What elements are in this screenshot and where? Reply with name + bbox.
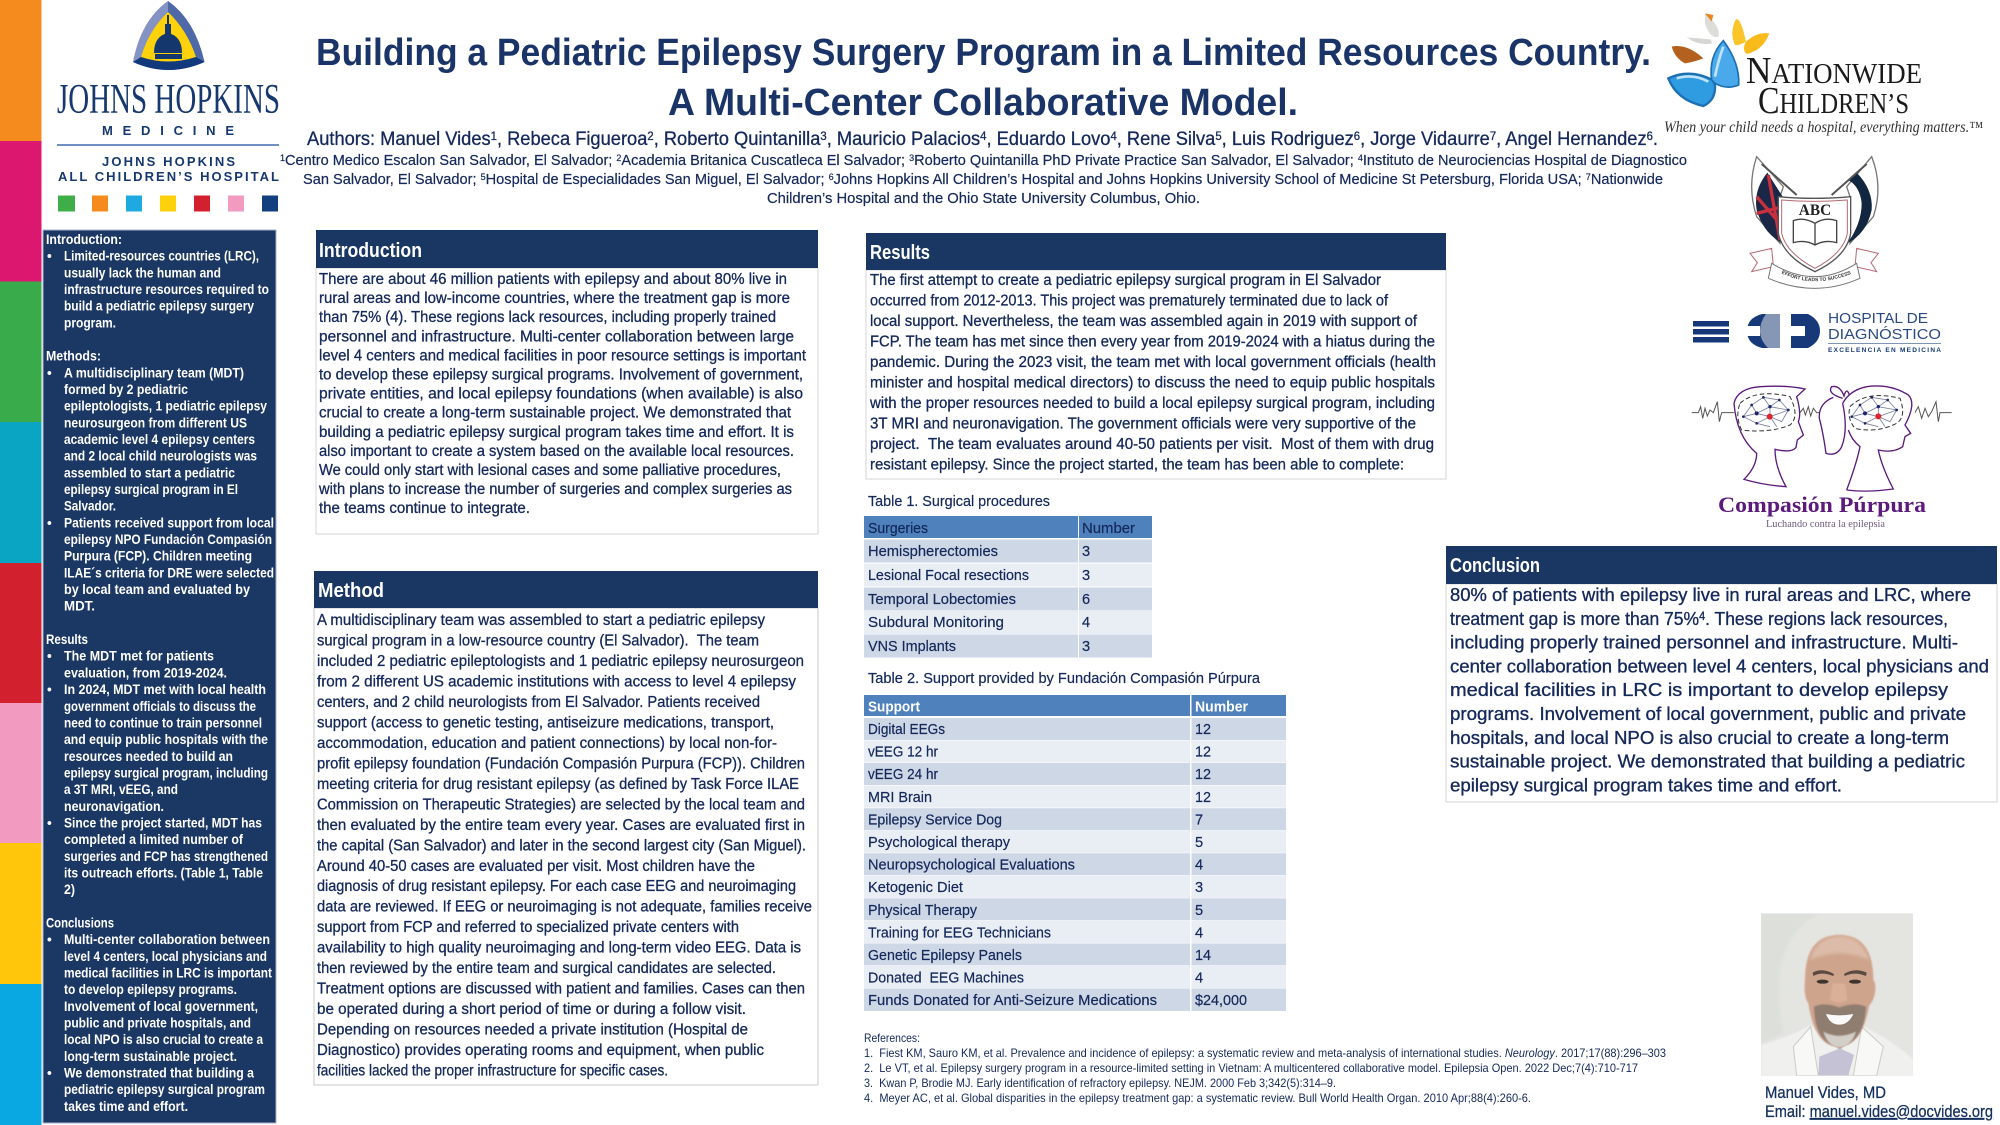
text block: method body: A multidisciplinary team was assembled to start a pediatric epilepsy [317,612,765,629]
heading: conclusion: Conclusion [1450,555,1540,577]
text block: results body: local support. Nevertheless, the team was assembled again in 2019 with support of [870,313,1418,330]
table 1: surgical procedures: 4 [1082,615,1090,631]
text block: conclusion body [1450,584,1989,795]
logo: Hospital de Diagnóstico [1693,311,1941,354]
panel: summary sidebar: long-term sustainable project. [64,1049,237,1064]
panel: summary sidebar: In 2024, MDT met with local health [64,682,266,697]
table 2: support provided by Fundación Compasión Púrpura: vEEG 12 hr [868,745,938,761]
panel: summary sidebar: local NPO is also crucial to create a [64,1032,263,1047]
text block: conclusion body: medical facilities in LRC is important to develop epilepsy [1450,679,1949,700]
panel: summary sidebar: Multi-center collaboration between [64,932,270,947]
logo: Academia Britanica Cuscatleca crest: ABC [1799,202,1831,219]
text block: conclusion body: hospitals, and local NPO is also crucial to create a long-term [1450,727,1949,748]
text block: method body: support from FCP and referred to specialized private centers with [317,919,739,936]
panel: summary sidebar: formed by 2 pediatric [64,382,188,397]
panel: summary sidebar: Limited-resources countries (LRC), [64,249,259,264]
table 2: support provided by Fundación Compasión Púrpura: 4 [1195,971,1203,987]
contact details: Manuel Vides, MD [1765,1083,1886,1102]
panel: summary sidebar: government officials to discuss the [64,699,256,714]
text block: conclusion body: including properly trained personnel and infrastructure. Multi- [1450,632,1958,653]
panel: summary sidebar: Patients received support from local [64,515,274,530]
logo: Hospital de Diagnóstico: DIAGNÓSTICO [1828,326,1941,343]
panel: summary sidebar: takes time and effort. [64,1099,188,1114]
panel: summary sidebar: Methods: [46,349,101,364]
text block: method body: support (access to genetic testing, antiseizure medications, transport, [317,714,774,731]
heading: results [866,233,1446,270]
panel: summary sidebar: ILAE´s criteria for DRE were selected [64,565,274,580]
panel: summary sidebar: need to continue to train personnel [64,715,262,730]
text block: introduction body: the teams continue to integrate. [319,500,530,517]
table 2: support provided by Fundación Compasión Púrpura: Training for EEG Technicians [868,925,1051,941]
references: 1. Fiest KM, Sauro KM, et al. Prevalence and incidence of epilepsy: a systematic review and meta-analysis of international studies. Neurology. 2017;17(88):296–303 [864,1047,1666,1060]
heading: method [314,571,818,608]
logo: Compasión Púrpura [1692,386,1952,530]
text block: method body: profit epilepsy foundation (Fundación Compasión Purpura (FCP)). Children [317,755,805,772]
logo: Johns Hopkins All Children's Hospital: MEDICINE [102,123,234,138]
table 1: surgical procedures: 3 [1082,544,1090,560]
table 2: support provided by Fundación Compasión Púrpura: Number [1195,700,1248,716]
panel: summary sidebar: build a pediatric epilepsy surgery [64,299,254,314]
logo: Nationwide Children's: NATIONWIDE [1746,50,1922,92]
text block: introduction body: level 4 centers and medical facilities in poor resource settings is important [319,347,807,364]
panel: summary sidebar: by local team and evaluated by [64,582,250,597]
logo: Johns Hopkins All Children's Hospital: JOHNS HOPKINS [102,154,235,169]
text block: method body: Diagnostico) provides operating rooms and equipment, when public [317,1042,764,1059]
text block: conclusion body: sustainable project. We demonstrated that building a pediatric [1450,751,1965,772]
table 2: support provided by Fundación Compasión Púrpura: $24,000 [1195,993,1247,1009]
logo: Academia Britanica Cuscatleca crest: EFFORT LEADS TO SUCCESS [1782,270,1851,282]
icon: two child profiles with brain networks [1692,386,1952,491]
panel: summary sidebar: The MDT met for patients [64,649,214,664]
text block: introduction body: crucial to create a long-term sustainable project. We demonstrated that [319,405,792,422]
text block: method body: then evaluated by the entire team every year. Cases are evaluated first in [317,817,805,834]
text block: conclusion body: 80% of patients with epilepsy live in rural areas and LRC, where [1450,584,1971,605]
table 1: surgical procedures: Lesional Focal resections [868,568,1029,584]
table 2: support provided by Fundación Compasión Púrpura: Neuropsychological Evaluations [868,858,1075,874]
table 2: support provided by Fundación Compasión Púrpura: 4 [1195,925,1203,941]
panel: summary sidebar: epilepsy surgical program in El [64,482,238,497]
table 2: support provided by Fundación Compasión Púrpura: 4 [1195,858,1203,874]
text block: introduction body: rural areas and low-income countries, where the treatment gap is more [319,290,790,307]
table 2: support provided by Fundación Compasión Púrpura: Epilepsy Service Dog [868,812,1002,828]
panel: summary sidebar: neurosurgeon from different US [64,415,247,430]
table 1: surgical procedures: 3 [1082,639,1090,655]
table 1: surgical procedures: Hemispherectomies [868,544,998,560]
panel: summary sidebar: • [47,365,52,380]
authors: Authors: Manuel Vides1, Rebeca Figueroa2, Roberto Quintanilla3, Mauricio Palacios4, Eduardo Lovo4, Rene Silva5, Luis Rodriguez6, Jorge Vidaurre7, Angel Hernandez6. [307,129,1658,150]
panel: summary sidebar: level 4 centers, local physicians and [64,949,267,964]
text block: method body: availability to high quality neuroimaging and long-term video EEG. Data is [317,940,801,957]
table 1: surgical procedures: Subdural Monitoring [868,615,1004,631]
references: 4. Meyer AC, et al. Global disparities in the epilepsy treatment gap: a systematic review. Bull World Health Organ. 2010 Apr;88(4):260-6. [864,1092,1531,1105]
text block: conclusion body: treatment gap is more than 75%4. These regions lack resources, [1450,608,1948,629]
panel: summary sidebar: Involvement of local government, [64,999,258,1014]
text block: results body: resistant epilepsy. Since the project started, the team has been able to complete: [870,456,1404,473]
logo: Johns Hopkins All Children's Hospital [57,1,280,212]
table 2: support provided by Fundación Compasión Púrpura: Ketogenic Diet [868,880,963,896]
table 1: surgical procedures: 3 [1082,568,1090,584]
text block: introduction body: We could only start with lesional cases and some palliative procedures, [319,462,781,479]
text block: method body: Around 40-50 cases are evaluated per visit. Most children have the [317,858,755,875]
panel: summary sidebar: infrastructure resources required to [64,282,269,297]
table 2: support provided by Fundación Compasión Púrpura: 12 [1195,790,1211,806]
text block: method body: centers, and 2 child neurologists from El Salvador. Patients received [317,694,760,711]
affiliations: 1Centro Medico Escalon San Salvador, El Salvador; 2Academia Britanica Cuscatleca El Salvador; 3Roberto Quintanilla PhD Private Practice San Salvador, El Salvador; 4Instituto de Neurociencias Hospital de Diagnostico [280,153,1687,169]
icon: butterflies [1668,13,1769,106]
text block: method body: then reviewed by the entire team and surgical candidates are selected. [317,960,776,977]
panel: summary sidebar [43,230,276,1123]
text block: method body: accommodation, education and patient connections) by local non-for- [317,735,777,752]
table 2: support provided by Fundación Compasión Púrpura: Support [868,700,920,716]
text block: conclusion body: programs. Involvement of local government, public and private [1450,703,1966,724]
table 2: support provided by Fundación Compasión Púrpura: MRI Brain [868,790,932,806]
table 2: support provided by Fundación Compasión Púrpura: 3 [1195,880,1203,896]
panel: summary sidebar: its outreach efforts. (Table 1, Table [64,866,263,880]
heading: introduction [316,230,818,268]
logo: Johns Hopkins All Children's Hospital: JOHNS HOPKINS [57,77,280,123]
table 1: surgical procedures: Surgeries [868,521,928,537]
heading: conclusion [1446,546,1997,584]
panel: introduction [316,230,818,534]
text block: results body: project. The team evaluates around 40-50 patients per visit. Most of them with drug [870,436,1434,453]
panel: summary sidebar: We demonstrated that building a [64,1066,254,1080]
panel: summary sidebar: • [47,932,52,947]
table 2: support provided by Fundación Compasión Púrpura: 5 [1195,903,1203,919]
text block: method body: the capital (San Salvador) and later in the second largest city (San Miguel). [317,837,806,854]
title: Building a Pediatric Epilepsy Surgery Program in a Limited Resources Country. [316,32,1651,74]
panel: summary sidebar: • [47,515,52,530]
heading: results: Results [870,242,930,264]
text block: introduction body [318,271,807,517]
panel: summary sidebar: • [47,649,52,664]
table 1: surgical procedures: Table 1. Surgical procedures [868,494,1050,510]
panel: summary sidebar: and equip public hospitals with the [64,732,268,747]
text block: method body: meeting criteria for drug resistant epilepsy (as defined by Task Force ILAE [317,776,799,793]
panel: summary sidebar: usually lack the human and [64,265,221,280]
panel: summary sidebar: epilepsy surgical program, including [64,765,268,780]
left colour strip [0,0,42,1125]
text block: results body: 3T MRI and neuronavigation. The government officials were very supportive of the [870,415,1416,432]
table 2: support provided by Fundación Compasión Púrpura: Digital EEGs [868,722,945,738]
text block: introduction body: than 75% (4). These regions lack resources, including properly trained [319,309,776,326]
table 2: support provided by Fundación Compasión Púrpura: 12 [1195,745,1211,761]
text block: results body: The first attempt to create a pediatric epilepsy surgical program in El Salvador [870,272,1381,289]
panel: summary sidebar: A multidisciplinary team (MDT) [64,365,244,380]
panel: summary sidebar: MDT. [64,599,95,614]
panel: summary sidebar: evaluation, from 2019-2024. [64,665,227,680]
panel: summary sidebar: • [47,815,52,830]
title: A Multi-Center Collaborative Model. [668,82,1298,124]
panel: summary sidebar: • [47,1066,52,1080]
text block: results body: FCP. The team has met since then every year from 2019-2024 with a hiatus during the [870,333,1435,350]
text block: method body: diagnosis of drug resistant epilepsy. For each case EEG and neuroimaging [317,878,796,895]
table 1: surgical procedures: 6 [1082,592,1090,608]
logo: Hospital de Diagnóstico: HOSPITAL DE [1828,311,1928,327]
text block: method body [317,612,812,1080]
panel: summary sidebar: epileptologists, 1 pediatric epilepsy [64,399,267,414]
logo: Hospital de Diagnóstico: EXCELENCIA EN MEDICINA [1828,347,1941,354]
table 2: support provided by Fundación Compasión Púrpura: 5 [1195,835,1203,851]
text block: method body: facilities lacked the proper infrastructure for specific cases. [317,1063,668,1080]
text block: method body: included 2 pediatric epileptologists and 1 pediatric epilepsy neurosurgeon [317,653,804,670]
panel: summary sidebar: • [47,249,52,264]
table 2: support provided by Fundación Compasión Púrpura: Table 2. Support provided by Fundación Compasión Púrpura [868,671,1261,687]
table 2: support provided by Fundación Compasión Púrpura: 12 [1195,767,1211,783]
logo: Academia Britanica Cuscatleca crest [1749,156,1880,289]
portrait photo: Manuel Vides [1761,913,1913,1076]
panel: method [314,571,818,1085]
table 1: surgical procedures: Temporal Lobectomies [868,592,1016,608]
panel: summary sidebar: neuronavigation. [64,799,164,814]
text block: introduction body: to develop these epilepsy surgical programs. Involvement of government, [319,366,803,384]
text block: method body: data are reviewed. If EEG or neuroimaging is not adequate, families receive [317,899,812,916]
panel: summary sidebar: 2) [64,882,75,897]
table 2: support provided by Fundación Compasión Púrpura: Genetic Epilepsy Panels [868,948,1022,964]
panel: results [866,233,1446,479]
table 2: support provided by Fundación Compasión Púrpura: 14 [1195,948,1211,964]
logo: Compasión Púrpura: Luchando contra la epilepsia [1766,518,1885,530]
panel: summary sidebar: resources needed to build an [64,749,233,764]
panel: summary sidebar: Conclusions [46,916,114,930]
panel: summary sidebar: Purpura (FCP). Children meeting [64,549,252,564]
logo: Compasión Púrpura: Compasión Púrpura [1718,492,1926,517]
panel: summary sidebar: • [47,682,52,697]
panel: summary sidebar: and 2 local child neurologists was [64,449,257,464]
panel: summary sidebar: Salvador. [64,499,116,514]
panel: summary sidebar: epilepsy NPO Fundación Compasión [64,532,272,547]
table 2: support provided by Fundación Compasión Púrpura: 12 [1195,722,1211,738]
text block: results body [869,272,1436,473]
table 1: surgical procedures [864,494,1152,658]
panel: summary sidebar: to develop epilepsy programs. [64,982,237,997]
table 2: support provided by Fundación Compasión Púrpura: Physical Therapy [868,903,978,919]
table 1: surgical procedures: Number [1082,521,1135,537]
text block: results body: pandemic. During the 2023 visit, the team met with local government officials (health [870,354,1436,371]
icon: Johns Hopkins shield [133,1,204,70]
table 2: support provided by Fundación Compasión Púrpura: vEEG 24 hr [868,767,938,783]
panel: summary sidebar: Since the project started, MDT has [64,815,262,830]
affiliations: San Salvador, El Salvador; 5Hospital de Especialidades San Miguel, El Salvador; 6Johns Hopkins All Children’s Hospital and Johns Hopkins University School of Medicine St Petersburg, Florida USA; 7Nationwide [303,172,1663,188]
text block: introduction body: There are about 46 million patients with epilepsy and about 80% live in [319,271,787,288]
text block: results body: minister and hospital medical directors) to discuss the need to equip public hospitals [870,374,1435,391]
text block: introduction body: building a pediatric epilepsy surgical program takes time and effort. It is [319,424,794,441]
text block: method body: Commission on Therapeutic Strategies) are selected by the local team and [317,796,805,813]
panel: summary sidebar: Results [46,632,88,647]
panel: summary sidebar: a 3T MRI, vEEG, and [64,782,178,797]
text block: introduction body: also important to create a system based on the available local resources. [319,443,794,460]
text block: results body: with the proper resources needed to build a local epilepsy surgical program, including [869,395,1435,412]
logo: Nationwide Children's: CHILDREN’S [1758,80,1909,122]
table 2: support provided by Fundación Compasión Púrpura: 7 [1195,812,1203,828]
text block: results body: occurred from 2012-2013. This project was prematurely terminated due to lack of [870,292,1389,310]
table 1: surgical procedures: VNS Implants [868,639,956,655]
title [316,32,1651,124]
references: 3. Kwan P, Brodie MJ. Early identification of refractory epilepsy. NEJM. 2000 Feb 3;342(5):314–9. [864,1077,1336,1090]
text block: introduction body: with plans to increase the number of surgeries and complex surgeries as [318,481,792,498]
panel: summary sidebar: completed a limited number of [64,832,243,847]
panel: conclusion [1446,546,1997,802]
references: References: [864,1032,920,1045]
text block: conclusion body: epilepsy surgical program takes time and effort. [1450,774,1842,795]
text block: method body: Treatment options are discussed with patient and families. Cases can then [317,981,805,998]
panel: summary sidebar: program. [64,315,116,330]
panel: summary sidebar: academic level 4 epilepsy centers [64,432,255,447]
text block: introduction body: personnel and infrastructure. Multi-center collaboration between large [319,328,794,345]
table 2: support provided by Fundación Compasión Púrpura: Funds Donated for Anti-Seizure Medications [868,993,1157,1009]
table 2: support provided by Fundación Compasión Púrpura [864,671,1286,1011]
text block: conclusion body: center collaboration between level 4 centers, local physicians and [1450,655,1989,676]
panel: summary sidebar: surgeries and FCP has strengthened [64,849,268,864]
panel: summary sidebar: medical facilities in LRC is important [64,966,272,980]
panel: summary sidebar: Introduction: [46,232,122,247]
references: 2. Le VT, et al. Epilepsy surgery program in a resource-limited setting in Vietnam: A multicentered collaborative model. Epilepsia Open. 2022 Dec;7(4):710-717 [864,1062,1638,1075]
text block: introduction body: private entities, and local epilepsy foundations (when available) is also [319,386,803,403]
table 2: support provided by Fundación Compasión Púrpura: Donated EEG Machines [868,971,1024,987]
text block: method body: be operated during a short period of time or during a follow visit. [317,1001,746,1018]
affiliations: Children’s Hospital and the Ohio State University Columbus, Ohio. [767,191,1200,207]
heading: introduction: Introduction [319,240,422,262]
heading: method: Method [318,580,384,602]
panel: summary sidebar: public and private hospitals, and [64,1016,251,1030]
text block: method body: surgical program in a low-resource country (El Salvador). The team [317,632,759,650]
text block: method body: from 2 different US academic institutions with access to level 4 epilepsy [317,673,796,690]
table 2: support provided by Fundación Compasión Púrpura: Psychological therapy [868,835,1011,851]
panel: summary sidebar: pediatric epilepsy surgical program [64,1082,265,1097]
affiliations [280,153,1687,207]
panel: summary sidebar: assembled to start a pediatric [64,465,235,480]
logo: Johns Hopkins All Children's Hospital: ALL CHILDREN’S HOSPITAL [58,169,279,184]
text block: method body: Depending on resources needed a private institution (Hospital de [317,1022,748,1039]
logo: Nationwide Children's [1664,13,1983,136]
contact details [1765,1083,1993,1121]
references [864,1032,1666,1105]
